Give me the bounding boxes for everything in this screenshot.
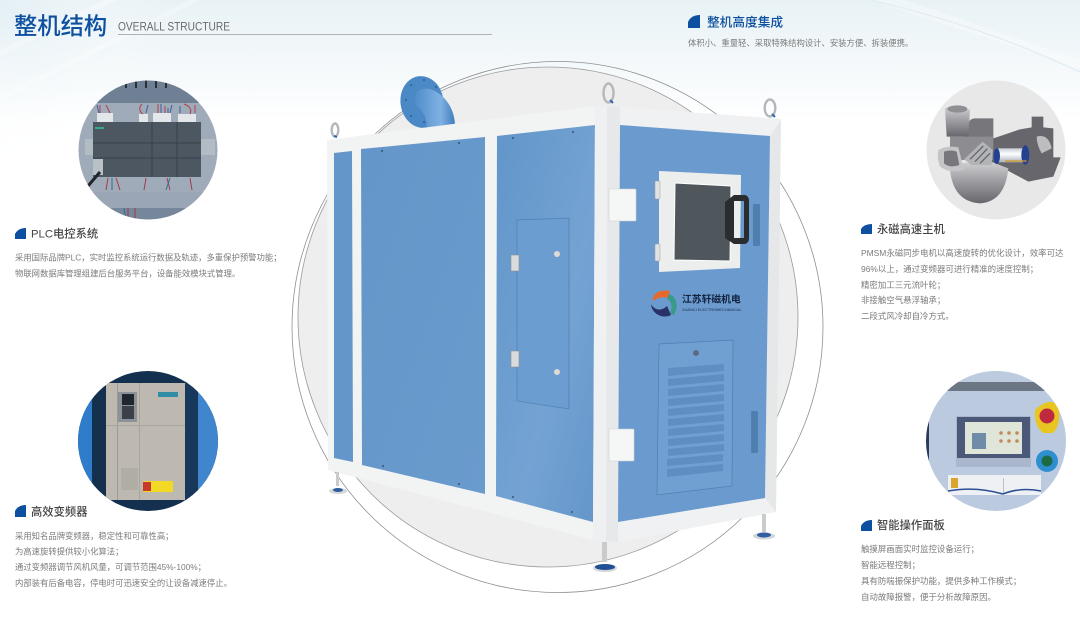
- text: PLC description: 采用国际品牌PLC，实时监控系统运行数据及轨迹，多重保护预警功能；: [15, 252, 282, 262]
- heading: motor: [861, 222, 945, 236]
- machine cabinet: [327, 73, 781, 572]
- viewing window: [655, 171, 760, 272]
- text: frequency converter description: 内部装有后备电容，停电时可迅速安全的让设备减速停止。: [15, 578, 232, 588]
- text: motor description: 96%以上，通过变频器可进行精准的速度控制；: [861, 264, 1038, 274]
- heading: control panel: 智能操作面板: [877, 518, 945, 532]
- icon: heading marker: [688, 15, 700, 28]
- photo: permanent magnet motor: [926, 80, 1067, 221]
- text: high integration description: 体积小、重量轻、采取特殊结构设计、安装方便、拆装便携。: [688, 38, 913, 48]
- heading: control panel: [861, 518, 945, 532]
- panel rivets: [381, 131, 574, 513]
- left frame: [327, 106, 595, 540]
- text: PLC description: 物联网数据库管理组建后台服务平台，设备能效模块式管理。: [15, 268, 240, 278]
- text: control panel description: 智能远程控制；: [861, 560, 920, 570]
- photo: frequency converter: [78, 370, 218, 512]
- heading: motor: 永磁高速主机: [877, 222, 945, 236]
- icon: heading marker: [15, 505, 26, 517]
- feet: [329, 472, 775, 572]
- icon: heading marker: [15, 228, 26, 239]
- photo: PLC controller: [78, 80, 218, 222]
- title underline: [118, 34, 492, 35]
- text: frequency converter description: 采用知名品牌变频器，稳定性和可靠性高；: [15, 531, 174, 541]
- side panels: [334, 125, 595, 522]
- eye bolts: [332, 84, 775, 137]
- text: frequency converter description: 通过变频器调节风机风量，可调节范围45%-100%；: [15, 562, 206, 572]
- text: motor description: 非接触空气悬浮轴承；: [861, 295, 945, 305]
- front panel: [618, 125, 770, 522]
- text: PLC description: [15, 252, 282, 278]
- text: motor description: PMSM永磁同步电机以高速旋转的优化设计，效率可达: [861, 248, 1064, 258]
- company logo: 江苏轩磁机电: [682, 292, 741, 306]
- photo: control panel: [925, 371, 1067, 513]
- text: motor description: [861, 248, 1064, 321]
- heading: frequency converter: [15, 504, 88, 518]
- text: frequency converter description: [15, 531, 232, 588]
- text: control panel description: 自动故障报警，便于分析故障原因。: [861, 592, 996, 602]
- text: frequency converter description: 为高速旋转提供较小化算法；: [15, 546, 123, 556]
- hinge brackets: [609, 189, 636, 461]
- outlet pipe: [397, 73, 455, 131]
- heading: frequency converter: 高效变频器: [31, 504, 88, 518]
- text: control panel description: 触摸屏画面实时监控设备运行；: [861, 544, 979, 554]
- front frame: [618, 107, 781, 542]
- louvered vent: [657, 340, 733, 495]
- text: control panel description: [861, 544, 1021, 602]
- corner column: [593, 106, 620, 542]
- text: motor description: 精密加工三元流叶轮；: [861, 280, 945, 290]
- text: motor description: 二段式风冷却自冷方式。: [861, 311, 954, 321]
- company logo: [651, 290, 743, 317]
- background circle with rings: [292, 62, 823, 592]
- heading: PLC: [15, 226, 98, 240]
- company logo: XUANCI ELECTROMECHANICAL: [682, 307, 743, 312]
- side handle: [751, 411, 758, 453]
- title: 整机结构: [14, 13, 107, 39]
- text: control panel description: 具有防喘振保护功能，提供多种工作模式；: [861, 576, 1021, 586]
- side access door: [511, 218, 569, 409]
- subtitle: OVERALL STRUCTURE: [118, 20, 230, 34]
- heading: PLC: PLC电控系统: [31, 226, 98, 240]
- icon: heading marker: [861, 224, 872, 234]
- heading: high integration: 整机高度集成: [707, 14, 783, 30]
- icon: heading marker: [861, 520, 872, 531]
